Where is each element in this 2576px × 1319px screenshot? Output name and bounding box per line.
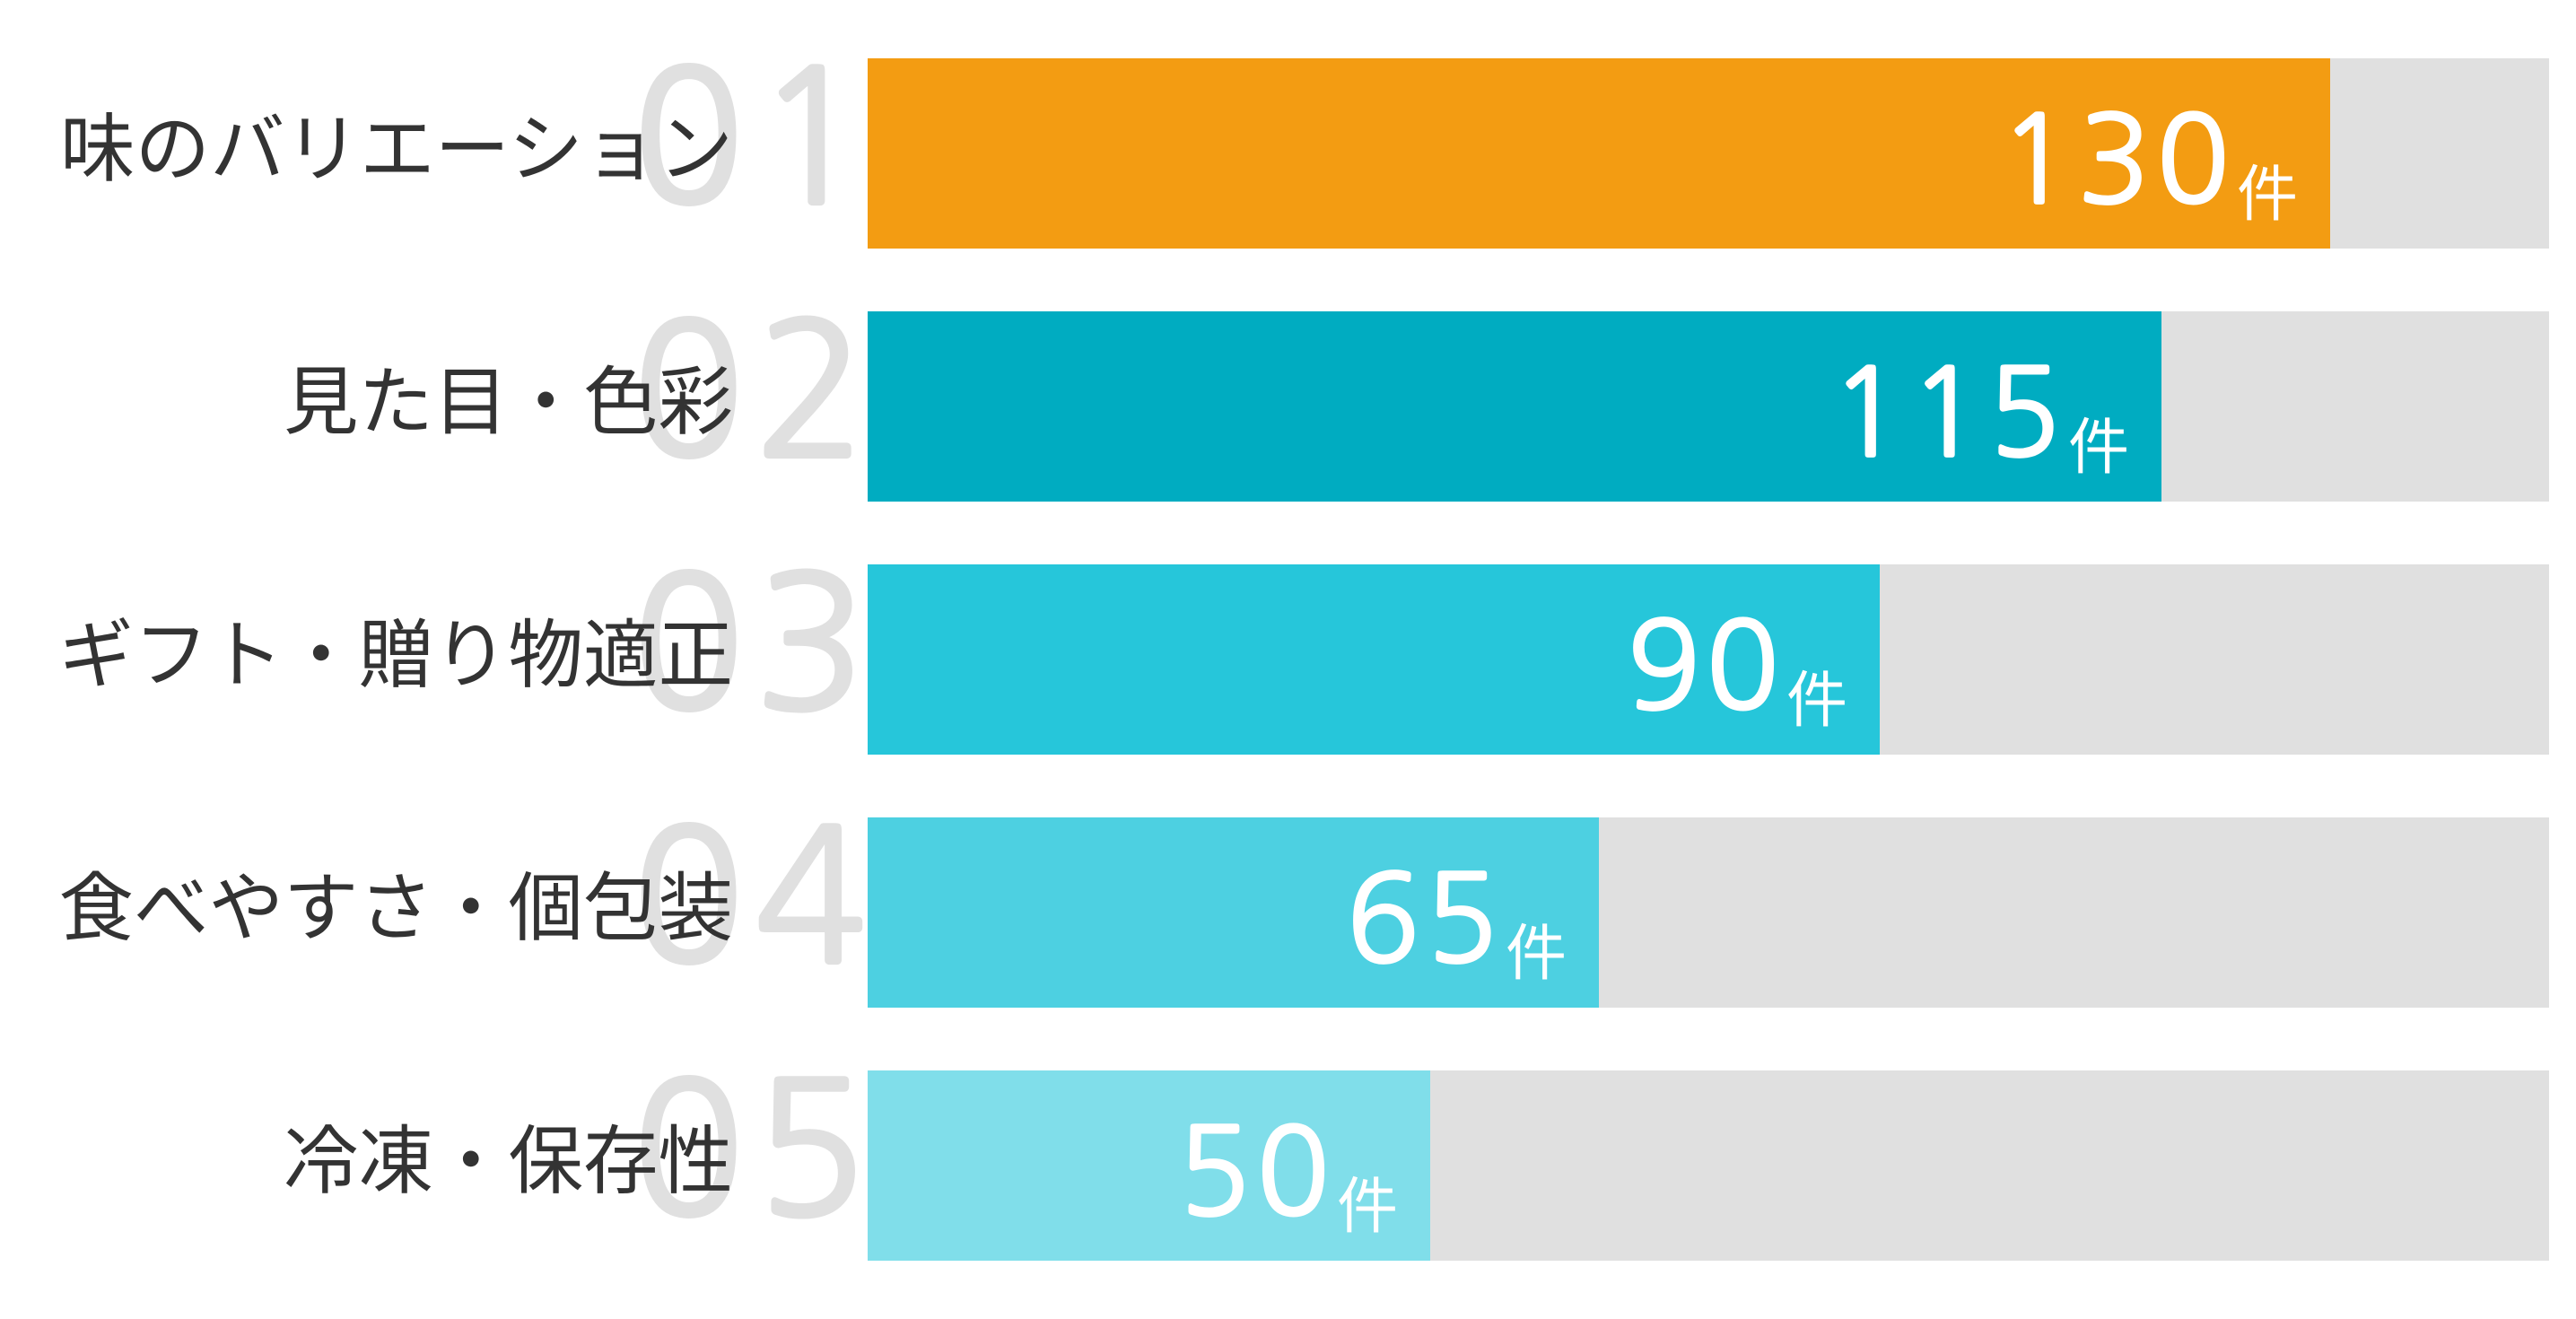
unit: 件 — [2068, 397, 2129, 486]
rank number 03: 03 — [633, 552, 877, 736]
label: taste variation: 味のバリエーション — [60, 107, 733, 191]
unit: 件 — [1786, 651, 1847, 739]
bar 04 — [868, 817, 1599, 1008]
track 05 — [868, 1070, 2549, 1261]
row 04: ease of eating and packaging — [59, 805, 2549, 1008]
rank number 05: 05 — [633, 1058, 877, 1242]
track 04 — [868, 817, 2549, 1008]
unit: 件 — [1506, 904, 1567, 992]
label: suitable as gift: ギフト・贈り物適正 — [59, 613, 733, 697]
label: freezing and storage: 冷凍・保存性 — [284, 1119, 733, 1203]
bar 03 — [868, 564, 1880, 755]
label: ease of eating and packaging: 食べやすさ・個包装 — [59, 866, 733, 950]
rank number 04: 04 — [633, 805, 877, 989]
value 130: 130 — [1999, 100, 2235, 221]
bar 05 — [868, 1070, 1430, 1261]
bar 02 — [868, 311, 2161, 502]
value 65: 65 — [1346, 859, 1504, 980]
value 115: 115 — [1830, 353, 2066, 474]
track 02 — [868, 311, 2549, 502]
row 02: appearance and colour — [284, 299, 2549, 502]
row 03: suitable as gift — [59, 552, 2549, 755]
label: appearance and colour: 見た目・色彩 — [284, 360, 733, 444]
unit: 件 — [2237, 144, 2298, 233]
value 90: 90 — [1627, 606, 1785, 727]
rank number 02: 02 — [633, 299, 877, 483]
rank number 01: 01 — [633, 46, 877, 230]
bar 01 — [868, 58, 2330, 249]
row 05: freezing and storage — [284, 1058, 2549, 1261]
unit: 件 — [1337, 1157, 1398, 1245]
value 50: 50 — [1177, 1112, 1335, 1233]
track 01 — [868, 58, 2549, 249]
track 03 — [868, 564, 2549, 755]
row 01: taste variation — [60, 46, 2549, 249]
